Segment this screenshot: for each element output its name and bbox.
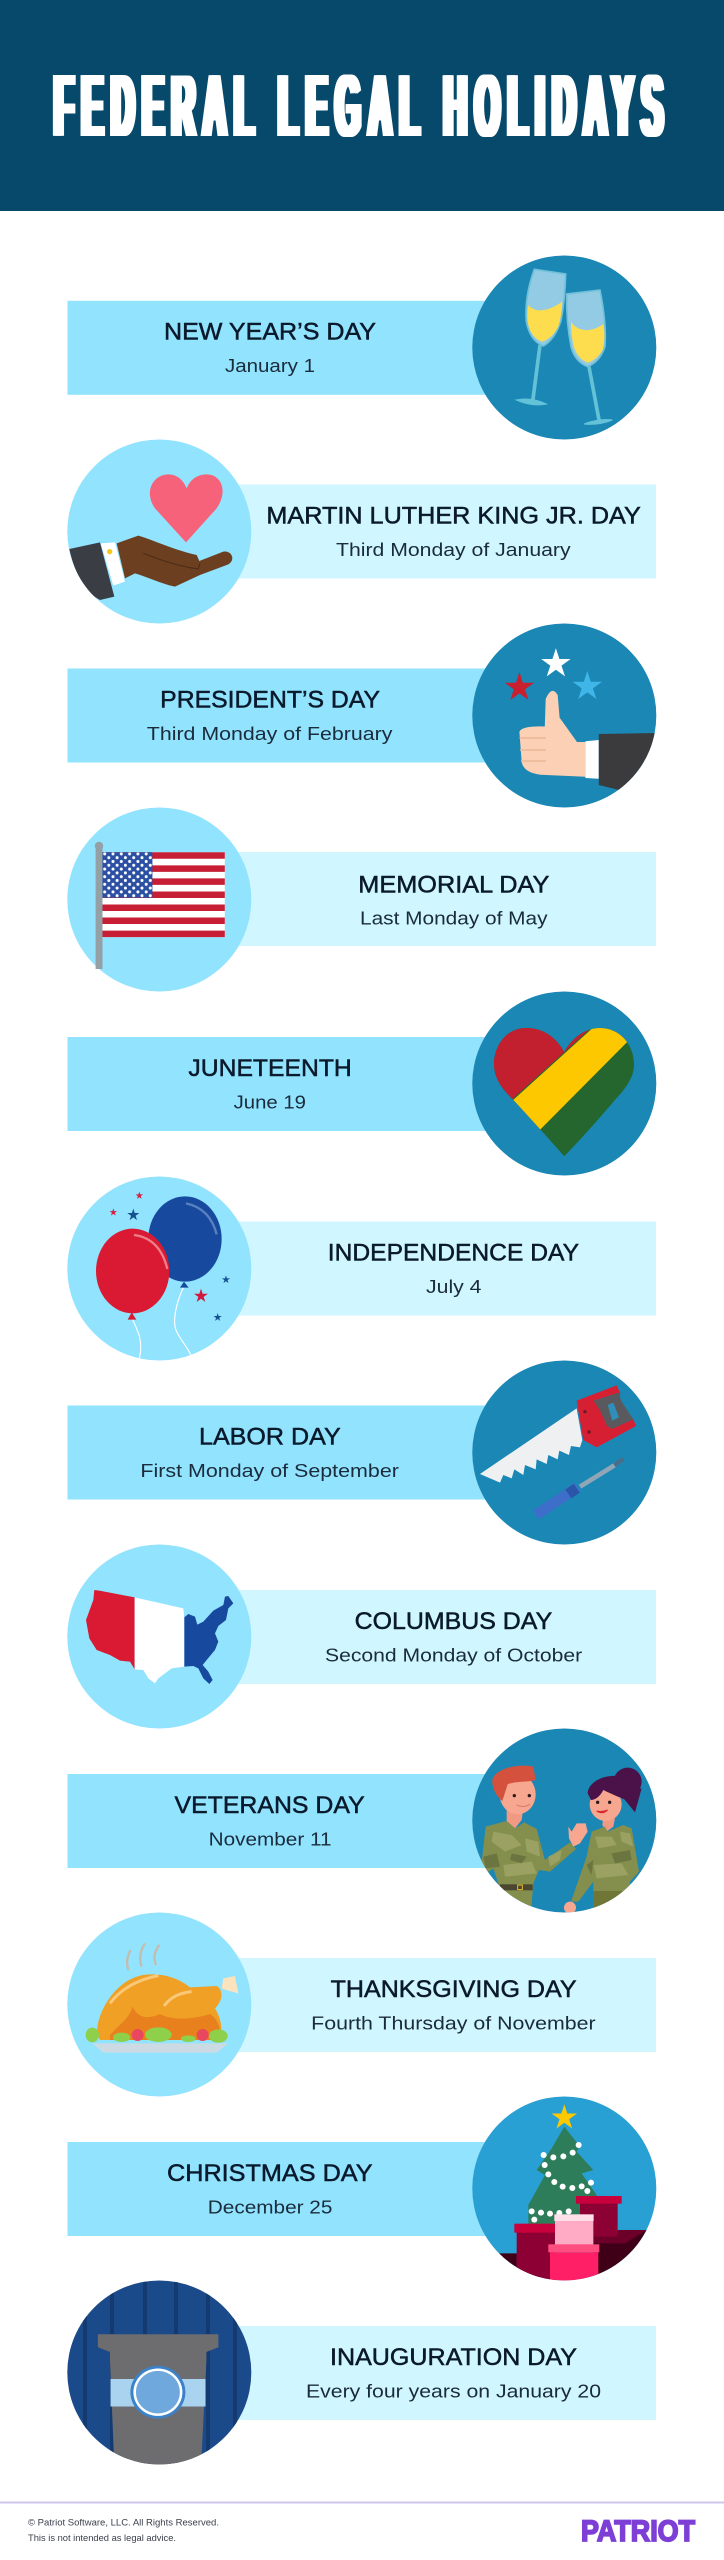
- icon: American flag: [67, 808, 251, 992]
- row: Labor Day: [68, 1360, 656, 1544]
- row: Thanksgiving Day: [67, 1912, 656, 2096]
- row: Inauguration Day: [67, 2280, 656, 2464]
- logo: Patriot: PATRIOT: [581, 2515, 695, 2548]
- footer: [0, 2502, 724, 2548]
- row: Juneteenth: June 19: [234, 1092, 306, 1112]
- icon: thumbs up with stars: [472, 624, 660, 808]
- row: Inauguration Day: Every four years on January 20: [306, 2380, 601, 2402]
- row: Columbus Day: COLUMBUS DAY: [355, 1608, 552, 1635]
- row: Memorial Day: Last Monday of May: [360, 908, 548, 928]
- row: Memorial Day: MEMORIAL DAY: [358, 872, 549, 899]
- row: Juneteenth: [68, 992, 656, 1176]
- row: Independence Day: July 4: [426, 1276, 482, 1297]
- disclaimer: This is not intended as legal advice.: [28, 2533, 176, 2543]
- row: Inauguration Day: INAUGURATION DAY: [330, 2344, 577, 2371]
- header banner: [0, 0, 724, 211]
- icon: US map in three colours: [67, 1544, 251, 1728]
- row: Martin Luther King Jr. Day: MARTIN LUTHER KING JR. DAY: [266, 503, 641, 530]
- row: Christmas Day: CHRISTMAS DAY: [167, 2160, 373, 2187]
- icon: hand holding heart: [67, 440, 251, 624]
- row: President's Day: PRESIDENT’S DAY: [160, 686, 380, 713]
- icon: balloons and stars: [67, 1176, 251, 1360]
- row: New Year's Day: NEW YEAR’S DAY: [164, 319, 376, 346]
- icon: podium with seal: [67, 2280, 252, 2464]
- row: Memorial Day: [67, 808, 656, 992]
- row: Thanksgiving Day: THANKSGIVING DAY: [331, 1976, 577, 2003]
- row: Veterans Day: VETERANS DAY: [174, 1792, 365, 1819]
- row: Independence Day: INDEPENDENCE DAY: [328, 1240, 579, 1266]
- row: Independence Day: [67, 1176, 656, 1360]
- row: Thanksgiving Day: Fourth Thursday of November: [311, 2012, 596, 2034]
- row: Juneteenth: JUNETEENTH: [188, 1055, 352, 1082]
- row: Labor Day: First Monday of September: [140, 1460, 399, 1481]
- row: Labor Day: LABOR DAY: [199, 1424, 341, 1450]
- icon: Christmas tree and presents: [472, 2096, 656, 2287]
- row: Martin Luther King Jr. Day: [67, 440, 656, 624]
- row: President's Day: [68, 624, 660, 808]
- icon: tri-colour heart: [472, 992, 656, 1176]
- row: President's Day: Third Monday of February: [147, 723, 393, 744]
- row: New Year's Day: [68, 256, 656, 440]
- row: New Year's Day: January 1: [225, 355, 315, 376]
- icon: two soldiers: [472, 1728, 656, 1914]
- title: FEDERAL LEGAL HOLIDAYS: [54, 56, 671, 154]
- row: Veterans Day: November 11: [209, 1828, 332, 1850]
- row: Christmas Day: December 25: [208, 2196, 332, 2218]
- icon: champagne glasses: [472, 256, 656, 440]
- row: Veterans Day: [68, 1728, 656, 1914]
- icon: hand saw and screwdriver: [472, 1360, 656, 1544]
- icon: roast turkey on a plate: [67, 1912, 251, 2096]
- row: Christmas Day: [68, 2096, 656, 2287]
- row: Martin Luther King Jr. Day: Third Monday of January: [336, 539, 571, 560]
- copyright note: © Patriot Software, LLC. All Rights Reserved.: [28, 2518, 219, 2528]
- row: Columbus Day: Second Monday of October: [325, 1644, 582, 1666]
- row: Columbus Day: [67, 1544, 656, 1728]
